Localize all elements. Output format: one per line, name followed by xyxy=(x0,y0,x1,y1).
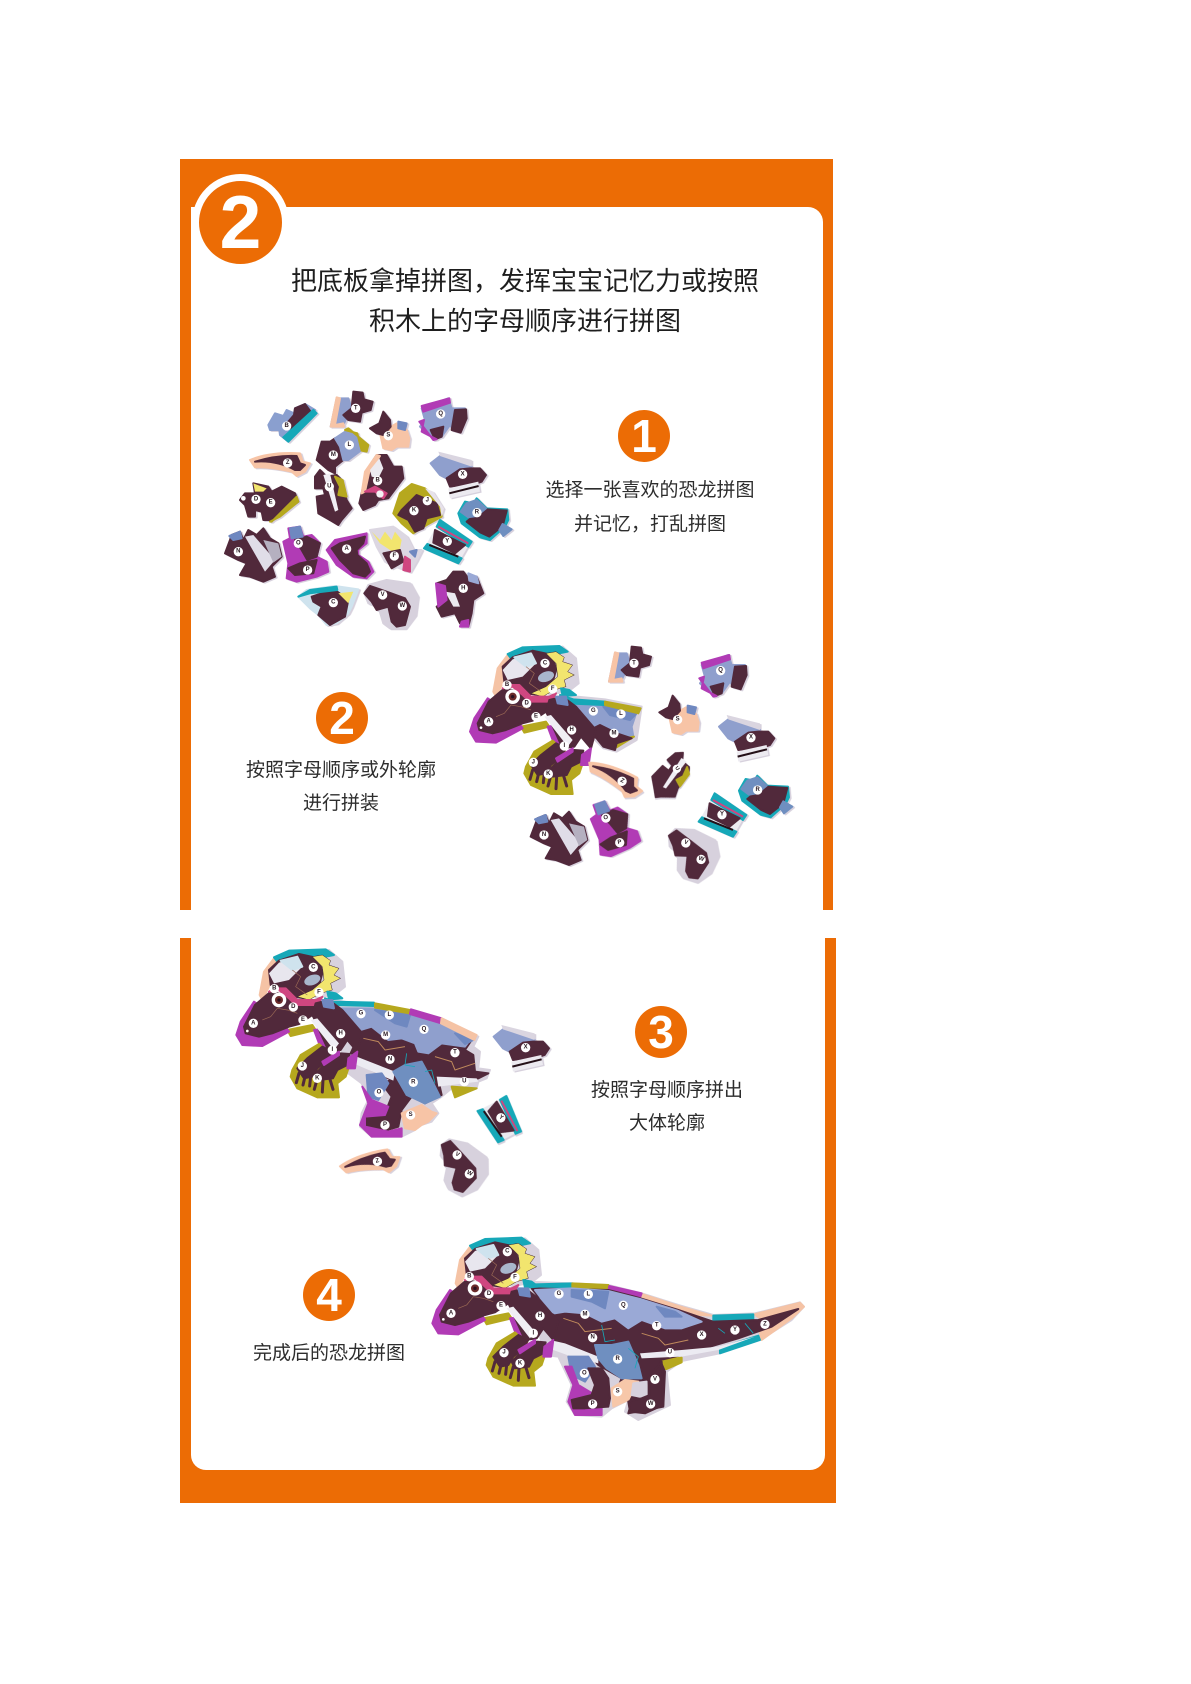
piece: U: U xyxy=(673,765,681,772)
dinosaur: body: T xyxy=(655,1323,659,1329)
panel: lower white card xyxy=(191,938,825,1470)
piece: D E: D xyxy=(254,496,259,502)
puzzle: completed dinosaur, step 4 xyxy=(432,1238,804,1420)
dinosaur: body: U xyxy=(668,1350,672,1356)
piece: B xyxy=(359,455,403,510)
step 4 number: 4 xyxy=(316,1269,342,1321)
dinosaur: body: Z xyxy=(763,1321,767,1327)
dinosaur: head and arms: J xyxy=(301,1063,304,1069)
dinosaur: head and arms: I xyxy=(331,1047,333,1053)
dinosaur: body: T xyxy=(453,1050,457,1056)
piece: D E: E xyxy=(269,500,273,506)
dinosaur: body: G xyxy=(359,1011,364,1017)
dinosaur: head and arms: K xyxy=(518,1360,523,1366)
dinosaur: head and arms: E xyxy=(301,1017,305,1023)
piece: T xyxy=(609,647,651,682)
step 1 number xyxy=(618,410,670,462)
step 2 number: 2 xyxy=(329,692,355,744)
piece: F: F xyxy=(392,553,396,559)
dinosaur: body: W xyxy=(648,1401,654,1407)
piece: Y xyxy=(469,1087,533,1150)
dinosaur: head and arms: B xyxy=(505,682,510,688)
piece: J K xyxy=(393,484,444,533)
piece: R: R xyxy=(755,787,760,793)
dinosaur: body xyxy=(525,1282,804,1415)
dinosaur: body: U xyxy=(462,1079,466,1085)
piece: Q: Q xyxy=(438,411,443,417)
piece: O P xyxy=(283,527,328,582)
dinosaur: head and arms: F xyxy=(317,989,321,995)
piece: A xyxy=(327,533,373,578)
piece: V W: V xyxy=(381,592,385,598)
step 4 text: 完成后的恐龙拼图 xyxy=(253,1343,405,1364)
piece: V W: W xyxy=(698,856,705,863)
piece: T: T xyxy=(354,405,358,411)
piece: X xyxy=(719,715,774,762)
dinosaur: head and arms xyxy=(236,949,362,1097)
dinosaur: body: P xyxy=(383,1122,387,1128)
piece: B xyxy=(268,404,317,442)
piece: Y: Y xyxy=(498,1114,504,1121)
step 1 text: 并记忆，打乱拼图 xyxy=(574,514,726,535)
dinosaur: head and arms: F xyxy=(551,686,555,692)
piece: D E xyxy=(240,483,298,522)
piece: V W: V xyxy=(683,839,689,846)
dinosaur: body: G xyxy=(557,1291,562,1297)
dinosaur: body: Y xyxy=(733,1327,737,1333)
piece: V W xyxy=(658,823,723,885)
piece: Q: Q xyxy=(718,668,723,674)
piece: X: X xyxy=(461,471,465,477)
dinosaur: body: S xyxy=(409,1112,413,1118)
step 4 number xyxy=(303,1269,355,1321)
piece: V W xyxy=(364,580,417,628)
piece: H xyxy=(436,572,483,627)
piece: X xyxy=(494,1025,549,1072)
piece: U: U xyxy=(327,484,331,490)
dinosaur: head and arms: H xyxy=(338,1031,343,1037)
dinosaur: back section G L M: M xyxy=(611,730,616,736)
panel: lower orange frame xyxy=(180,938,836,1503)
puzzle: scattered pieces, step 1 xyxy=(225,392,512,628)
dinosaur: head and arms: D xyxy=(487,1291,492,1297)
piece: V W: W xyxy=(399,603,405,609)
step 2 text: 进行拼装 xyxy=(303,793,379,814)
dinosaur: head and arms: B xyxy=(272,986,277,992)
dinosaur: body: R xyxy=(411,1079,416,1085)
dinosaur: body: L xyxy=(586,1291,590,1297)
dinosaur: head and arms: K xyxy=(546,771,551,777)
dinosaur: back section G L M: G xyxy=(591,708,596,714)
dinosaur: body: V xyxy=(653,1376,657,1382)
dinosaur: head and arms: A xyxy=(251,1020,256,1026)
piece: T: T xyxy=(632,660,636,666)
piece: O P: P xyxy=(306,567,310,573)
piece: Z xyxy=(339,1147,402,1182)
piece: Z xyxy=(582,756,647,802)
dinosaur: head and arms: F xyxy=(513,1274,517,1280)
dinosaur: body xyxy=(325,998,490,1137)
dinosaur: head and arms: J xyxy=(532,759,535,765)
piece: U xyxy=(315,470,352,525)
title xyxy=(291,266,759,336)
piece: V W: W xyxy=(465,1170,474,1178)
piece: H: H xyxy=(461,585,465,591)
dinosaur: head and arms xyxy=(470,646,596,794)
dinosaur: head and arms: H xyxy=(569,727,574,733)
piece: F xyxy=(370,527,422,572)
dinosaur: head and arms: H xyxy=(538,1313,542,1319)
dinosaur: body: N xyxy=(388,1056,392,1062)
dinosaur: body: O xyxy=(377,1090,382,1096)
piece: O P: O xyxy=(296,540,301,546)
dinosaur: body: O xyxy=(582,1370,587,1376)
dinosaur: head and arms: E xyxy=(534,714,538,720)
piece: R: R xyxy=(475,510,480,516)
dinosaur: back section G L M xyxy=(560,695,642,752)
piece: M L: M xyxy=(331,452,336,458)
step 3 number xyxy=(635,1006,687,1058)
piece: Y xyxy=(424,520,472,563)
piece: S xyxy=(659,696,699,734)
piece: Z xyxy=(250,453,310,476)
piece: S: S xyxy=(386,433,390,439)
piece: X: X xyxy=(749,735,753,741)
title: 积木上的字母顺序进行拼图 xyxy=(369,306,681,336)
piece: R xyxy=(739,776,792,817)
dinosaur: head and arms: D xyxy=(291,1004,296,1010)
dinosaur: body: L xyxy=(387,1012,391,1018)
dinosaur: body: P xyxy=(591,1401,595,1407)
piece: J K: J xyxy=(426,498,429,504)
step 3 text: 按照字母顺序拼出 xyxy=(591,1080,743,1101)
dinosaur: body: R xyxy=(615,1356,620,1362)
step 3 text xyxy=(591,1080,743,1134)
piece: N: N xyxy=(236,549,240,555)
step 2 text: 按照字母顺序或外轮廓 xyxy=(246,760,436,781)
dinosaur: body: S xyxy=(616,1389,620,1395)
dinosaur: head and arms: I xyxy=(532,1330,534,1336)
piece: O P: P xyxy=(617,839,622,846)
dinosaur: head and arms: K xyxy=(315,1075,320,1081)
puzzle: partial dinosaur and loose pieces, step 2 xyxy=(470,646,792,885)
piece: S: S xyxy=(676,717,680,723)
dinosaur: head and arms: C xyxy=(311,964,316,970)
piece: O P: O xyxy=(603,815,609,821)
piece: Z: Z xyxy=(286,460,290,466)
piece: M L xyxy=(317,428,368,473)
dinosaur: body: Q xyxy=(422,1026,427,1032)
step 1 text xyxy=(545,480,754,535)
piece: J K: K xyxy=(412,508,417,514)
dinosaur: head and arms: E xyxy=(499,1303,503,1309)
dinosaur: body: M xyxy=(582,1311,587,1317)
dinosaur: head and arms: I xyxy=(563,743,565,749)
dinosaur: body: N xyxy=(590,1335,595,1341)
piece: T xyxy=(331,392,373,427)
dinosaur: head and arms: C xyxy=(543,660,548,666)
dinosaur: head and arms: A xyxy=(486,719,491,725)
dinosaur: body: X xyxy=(700,1332,704,1338)
piece: C xyxy=(298,586,358,625)
step 2 text xyxy=(246,760,436,814)
piece: N: N xyxy=(542,832,546,838)
piece: X xyxy=(431,452,486,498)
piece: U xyxy=(642,749,701,806)
dinosaur: head and arms: J xyxy=(502,1350,506,1356)
piece: B: B xyxy=(375,478,380,484)
dinosaur: back section G L M: L xyxy=(619,711,623,717)
badge: big step number 2 xyxy=(192,174,289,271)
dinosaur: head and arms: B xyxy=(467,1274,472,1280)
piece: B: B xyxy=(284,423,289,429)
piece: Y: Y xyxy=(445,538,449,544)
piece: Q xyxy=(699,655,747,697)
piece: R xyxy=(458,498,512,540)
step 3 text: 大体轮廓 xyxy=(629,1113,705,1134)
piece: O P xyxy=(588,796,642,858)
dinosaur: head and arms: A xyxy=(449,1310,454,1316)
piece: Q xyxy=(419,398,467,440)
step 1 text: 选择一张喜欢的恐龙拼图 xyxy=(545,480,754,501)
piece: A: A xyxy=(344,546,349,552)
dinosaur: body: Q xyxy=(621,1302,626,1308)
piece: C: C xyxy=(331,600,336,606)
dinosaur: body: M xyxy=(383,1032,388,1038)
puzzle: mostly assembled dinosaur, step 3 xyxy=(236,949,549,1201)
panel: upper white card xyxy=(191,207,823,910)
badge: big step number 2: 2 xyxy=(220,180,261,264)
piece: V W xyxy=(425,1133,495,1201)
piece: Y: Y xyxy=(720,812,724,818)
dinosaur: head and arms: D xyxy=(524,700,529,706)
piece: V W: V xyxy=(454,1151,460,1159)
piece: S xyxy=(370,412,409,450)
step 3 number: 3 xyxy=(648,1006,674,1058)
piece: Z: Z xyxy=(619,778,625,785)
panel: upper orange frame xyxy=(180,159,833,910)
step 2 number xyxy=(316,692,368,744)
piece: Z: Z xyxy=(375,1158,380,1165)
piece: M L: L xyxy=(347,442,351,448)
piece: Y xyxy=(699,793,746,837)
piece: X: X xyxy=(524,1045,528,1051)
piece: N xyxy=(531,812,587,865)
title: 把底板拿掉拼图，发挥宝宝记忆力或按照 xyxy=(291,266,759,296)
dinosaur: backing xyxy=(525,1282,804,1420)
piece: N xyxy=(225,528,282,582)
dinosaur: head and arms: C xyxy=(505,1249,510,1255)
dinosaur: head and arms xyxy=(432,1238,558,1386)
step 1 number: 1 xyxy=(631,410,657,462)
